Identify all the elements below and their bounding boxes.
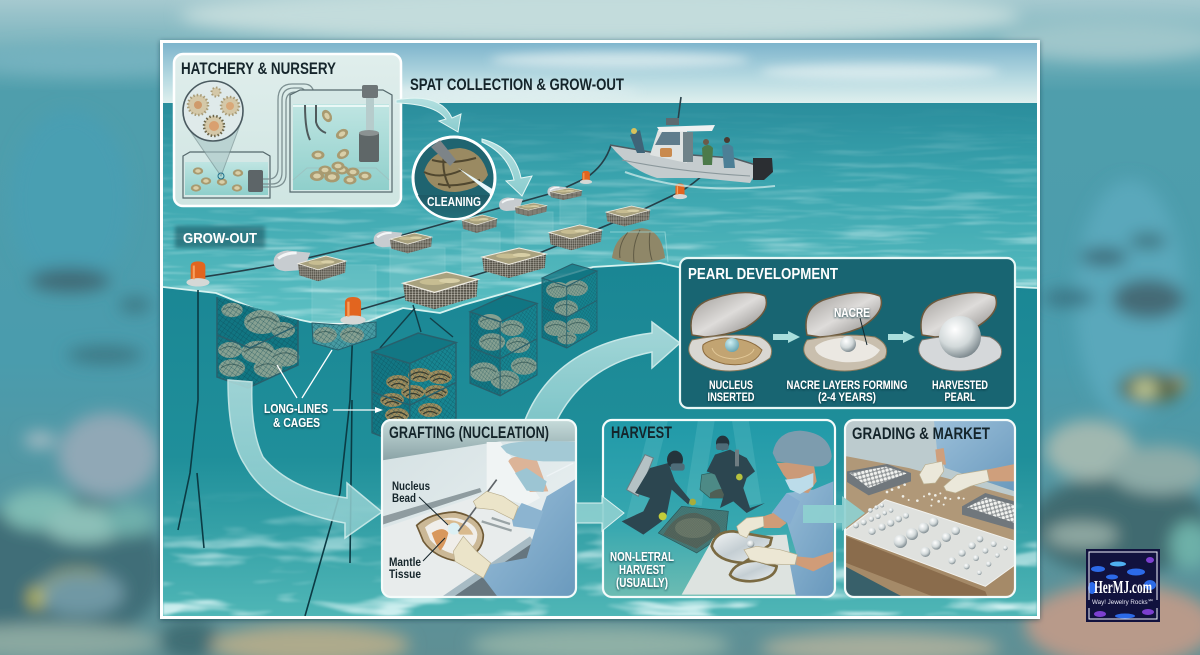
callout: long-lines and cages: & CAGES <box>273 415 320 430</box>
surface line rows <box>196 145 611 278</box>
heading: hatchery: HATCHERY & NURSERY <box>181 60 336 78</box>
floats <box>274 186 567 271</box>
panel: grading and market <box>842 418 1020 600</box>
panel: grafting <box>380 418 580 600</box>
icon: magnifier cone <box>186 125 240 176</box>
icon: worker body <box>772 481 833 600</box>
right coral <box>1030 475 1200 575</box>
captions: steps <box>708 378 988 404</box>
arrow: grow-out to grafting <box>228 380 382 538</box>
cage A <box>217 297 299 388</box>
arrow: grafting to harvest <box>576 496 624 531</box>
logo: HerMJ.com: Way! Jewelry Rocks℠ <box>1092 598 1154 606</box>
cage B <box>312 322 376 350</box>
underwater zone <box>163 263 1037 616</box>
icon: nursery tank <box>290 85 392 192</box>
icon: graded pearls <box>853 503 1008 575</box>
captions: steps: (2-4 YEARS) <box>818 390 876 404</box>
arrow: harvest to grading <box>803 496 865 531</box>
icon: oyster being grafted <box>417 512 483 561</box>
icon: gloved hands <box>919 461 989 493</box>
label: non-lethal harvest: HARVEST <box>619 562 665 577</box>
icon: shell with nacre layers <box>804 292 887 371</box>
icon: diver one <box>622 451 696 535</box>
gloves <box>737 516 764 538</box>
faint hanging nets <box>312 198 586 323</box>
callout: long-lines and cages: LONG-LINES <box>264 401 328 416</box>
cage D <box>470 295 537 396</box>
label: grow-out <box>175 226 265 248</box>
label: spat collection: SPAT COLLECTION & GROW-OUT <box>410 76 624 94</box>
icon: loose small pearls <box>886 483 965 507</box>
icon: white grading tray <box>842 500 1020 586</box>
icon: boat <box>610 97 775 189</box>
cage C large <box>372 305 456 447</box>
anchor ropes <box>178 290 353 616</box>
head <box>508 457 548 492</box>
left fish and coral <box>58 413 158 497</box>
icon: pipes <box>263 84 314 187</box>
label: nucleus bead <box>392 479 448 525</box>
icon: diver two <box>700 436 765 513</box>
ocean scene <box>163 43 1037 616</box>
panel: harvest: HARVEST <box>611 424 672 442</box>
label: mantle tissue: Mantle <box>389 555 421 569</box>
label: non-lethal harvest: NON-LETRAL <box>610 549 674 564</box>
body <box>484 480 575 596</box>
label: non-lethal harvest <box>610 549 674 590</box>
captions: steps: HARVESTED <box>932 378 988 392</box>
arrow: grafting to pearl development <box>525 322 680 420</box>
captions: steps: NACRE LAYERS FORMING <box>786 378 908 392</box>
icon: worker torso <box>934 421 1014 491</box>
label: cleaning: CLEANING <box>427 194 481 209</box>
gloves <box>473 491 518 520</box>
sack <box>610 228 668 263</box>
captions: steps: INSERTED <box>708 390 755 404</box>
buoys <box>186 171 687 325</box>
label: nacre: NACRE <box>834 305 870 320</box>
panel: grading and market: GRADING & MARKET <box>852 425 990 443</box>
bottom strip <box>160 620 220 655</box>
icon: shell with harvested pearl <box>919 292 1002 371</box>
logo: HerMJ.com <box>1086 549 1160 622</box>
main illustration frame <box>162 42 1038 618</box>
panel: pearl development <box>680 258 1015 408</box>
captions: steps: NUCLEUS <box>709 378 753 392</box>
label: mantle tissue <box>389 538 445 581</box>
arrow: cleaning to long-lines <box>482 139 532 196</box>
heading: pearl development: PEARL DEVELOPMENT <box>688 266 838 283</box>
label: nucleus bead: Bead <box>392 491 416 505</box>
panel: harvest <box>600 418 840 600</box>
label: grow-out: GROW-OUT <box>183 230 257 247</box>
surface baskets <box>298 188 650 309</box>
long-lines and cages <box>178 145 712 616</box>
panel: grafting: GRAFTING (NUCLEATION) <box>389 424 549 442</box>
icon: larvae close-up <box>183 81 243 141</box>
panel: hatchery and nursery <box>174 54 401 206</box>
head <box>777 461 817 493</box>
label: nucleus bead: Nucleus <box>392 479 430 493</box>
icon: pearl trays <box>847 464 1020 531</box>
arrow: hatchery to cleaning <box>396 98 461 132</box>
captions: steps: PEARL <box>944 390 976 404</box>
icon: shell with nucleus <box>689 292 772 371</box>
icon: harvest net <box>658 506 728 553</box>
icon: larval tank <box>183 152 270 198</box>
icon: open shell with pearl <box>712 531 777 581</box>
callout: long-lines and cages <box>264 350 383 430</box>
cage E <box>542 264 597 348</box>
label: non-lethal harvest: (USUALLY) <box>616 575 668 590</box>
icon: cleaning oyster badge <box>410 137 500 225</box>
arrow: step 1 to 2 <box>773 331 800 343</box>
logo: HerMJ.com: HerMJ.com <box>1094 577 1152 597</box>
label: mantle tissue: Tissue <box>389 567 421 581</box>
arrow: step 2 to 3 <box>888 331 915 343</box>
